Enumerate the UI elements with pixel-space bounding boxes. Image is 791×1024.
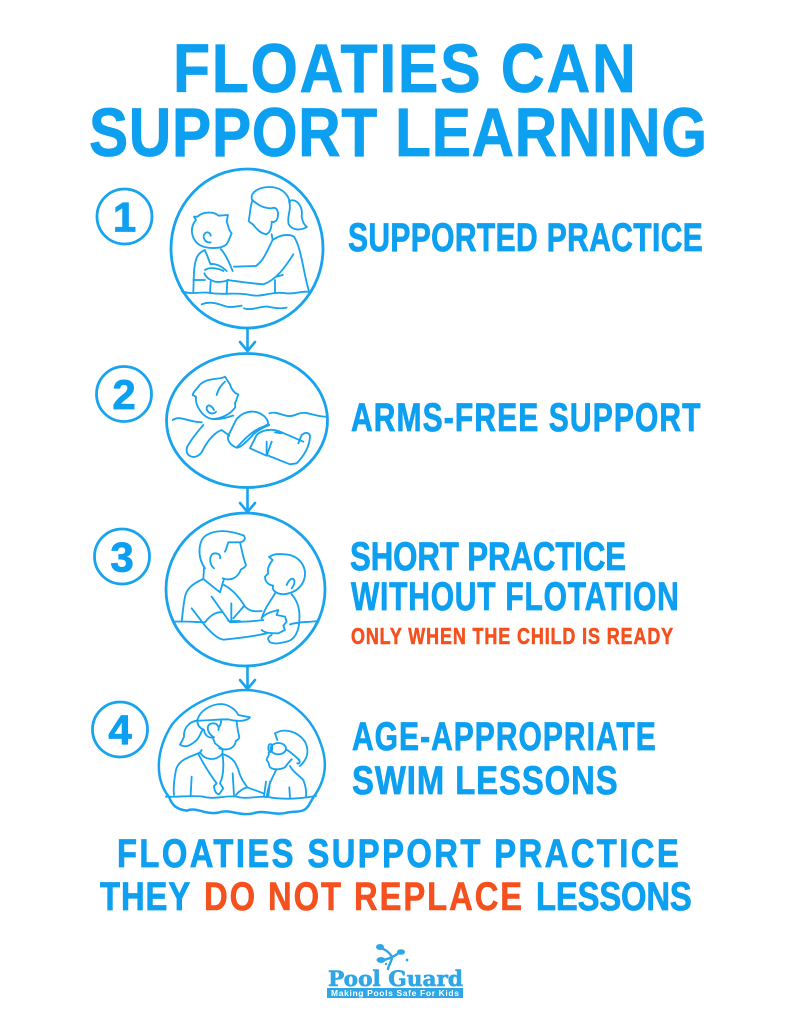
title: SUPPORT LEARNING (89, 94, 707, 171)
number badge 4 (92, 702, 148, 757)
number badge 3 (94, 529, 150, 584)
label: supported practice: SUPPORTED PRACTICE (348, 216, 703, 260)
number badge 2 (96, 366, 152, 422)
number badge 1 (97, 189, 152, 244)
label: age-appropriate swim lessons (352, 715, 656, 803)
closing message: FLOATIES SUPPORT PRACTICE (117, 831, 679, 876)
number badge 3: 3 (110, 534, 134, 580)
arrow: step 2 to step 3 (240, 488, 255, 512)
icon: water splash (376, 944, 408, 969)
number badge 4: 4 (108, 706, 132, 754)
panel: step 2 arms-free support (96, 354, 701, 512)
label: age-appropriate swim lessons: SWIM LESSONS (352, 758, 618, 803)
arrow: step 3 to step 4 (240, 666, 255, 689)
panel: step 4 age-appropriate swim lessons (92, 690, 656, 814)
panel: step 3 short practice without flotation (94, 513, 679, 689)
label: short practice without flotation (350, 534, 679, 650)
icon: adult holding child in water (166, 513, 325, 666)
number badge 1: 1 (113, 194, 136, 240)
note: only when ready: ONLY WHEN THE CHILD IS READY (351, 624, 673, 650)
number badge 2: 2 (112, 371, 136, 418)
panel: step 1 supported practice (97, 169, 703, 351)
logo: Pool Guard (327, 944, 463, 998)
label: short practice without flotation: SHORT PRACTICE (350, 534, 626, 579)
logo: Pool Guard: Pool Guard (328, 966, 463, 991)
title: FLOATIES CAN (173, 29, 636, 107)
title (89, 29, 707, 171)
label: age-appropriate swim lessons: AGE-APPROPRIATE (352, 715, 656, 759)
closing message: DO NOT REPLACE (204, 874, 522, 919)
closing message (100, 831, 692, 919)
label: arms-free support: ARMS-FREE SUPPORT (351, 396, 701, 440)
closing message: THEY (100, 874, 190, 919)
logo: Pool Guard: Making Pools Safe For Kids (331, 988, 459, 998)
icon: child floating with arm bands (166, 354, 328, 488)
label: short practice without flotation: WITHOUT FLOTATION (351, 575, 679, 619)
icon: parent supporting child in life vest (171, 169, 323, 328)
arrow: step 1 to step 2 (240, 328, 255, 351)
closing message: LESSONS (536, 874, 692, 919)
icon: instructor with child in goggles (159, 690, 325, 814)
